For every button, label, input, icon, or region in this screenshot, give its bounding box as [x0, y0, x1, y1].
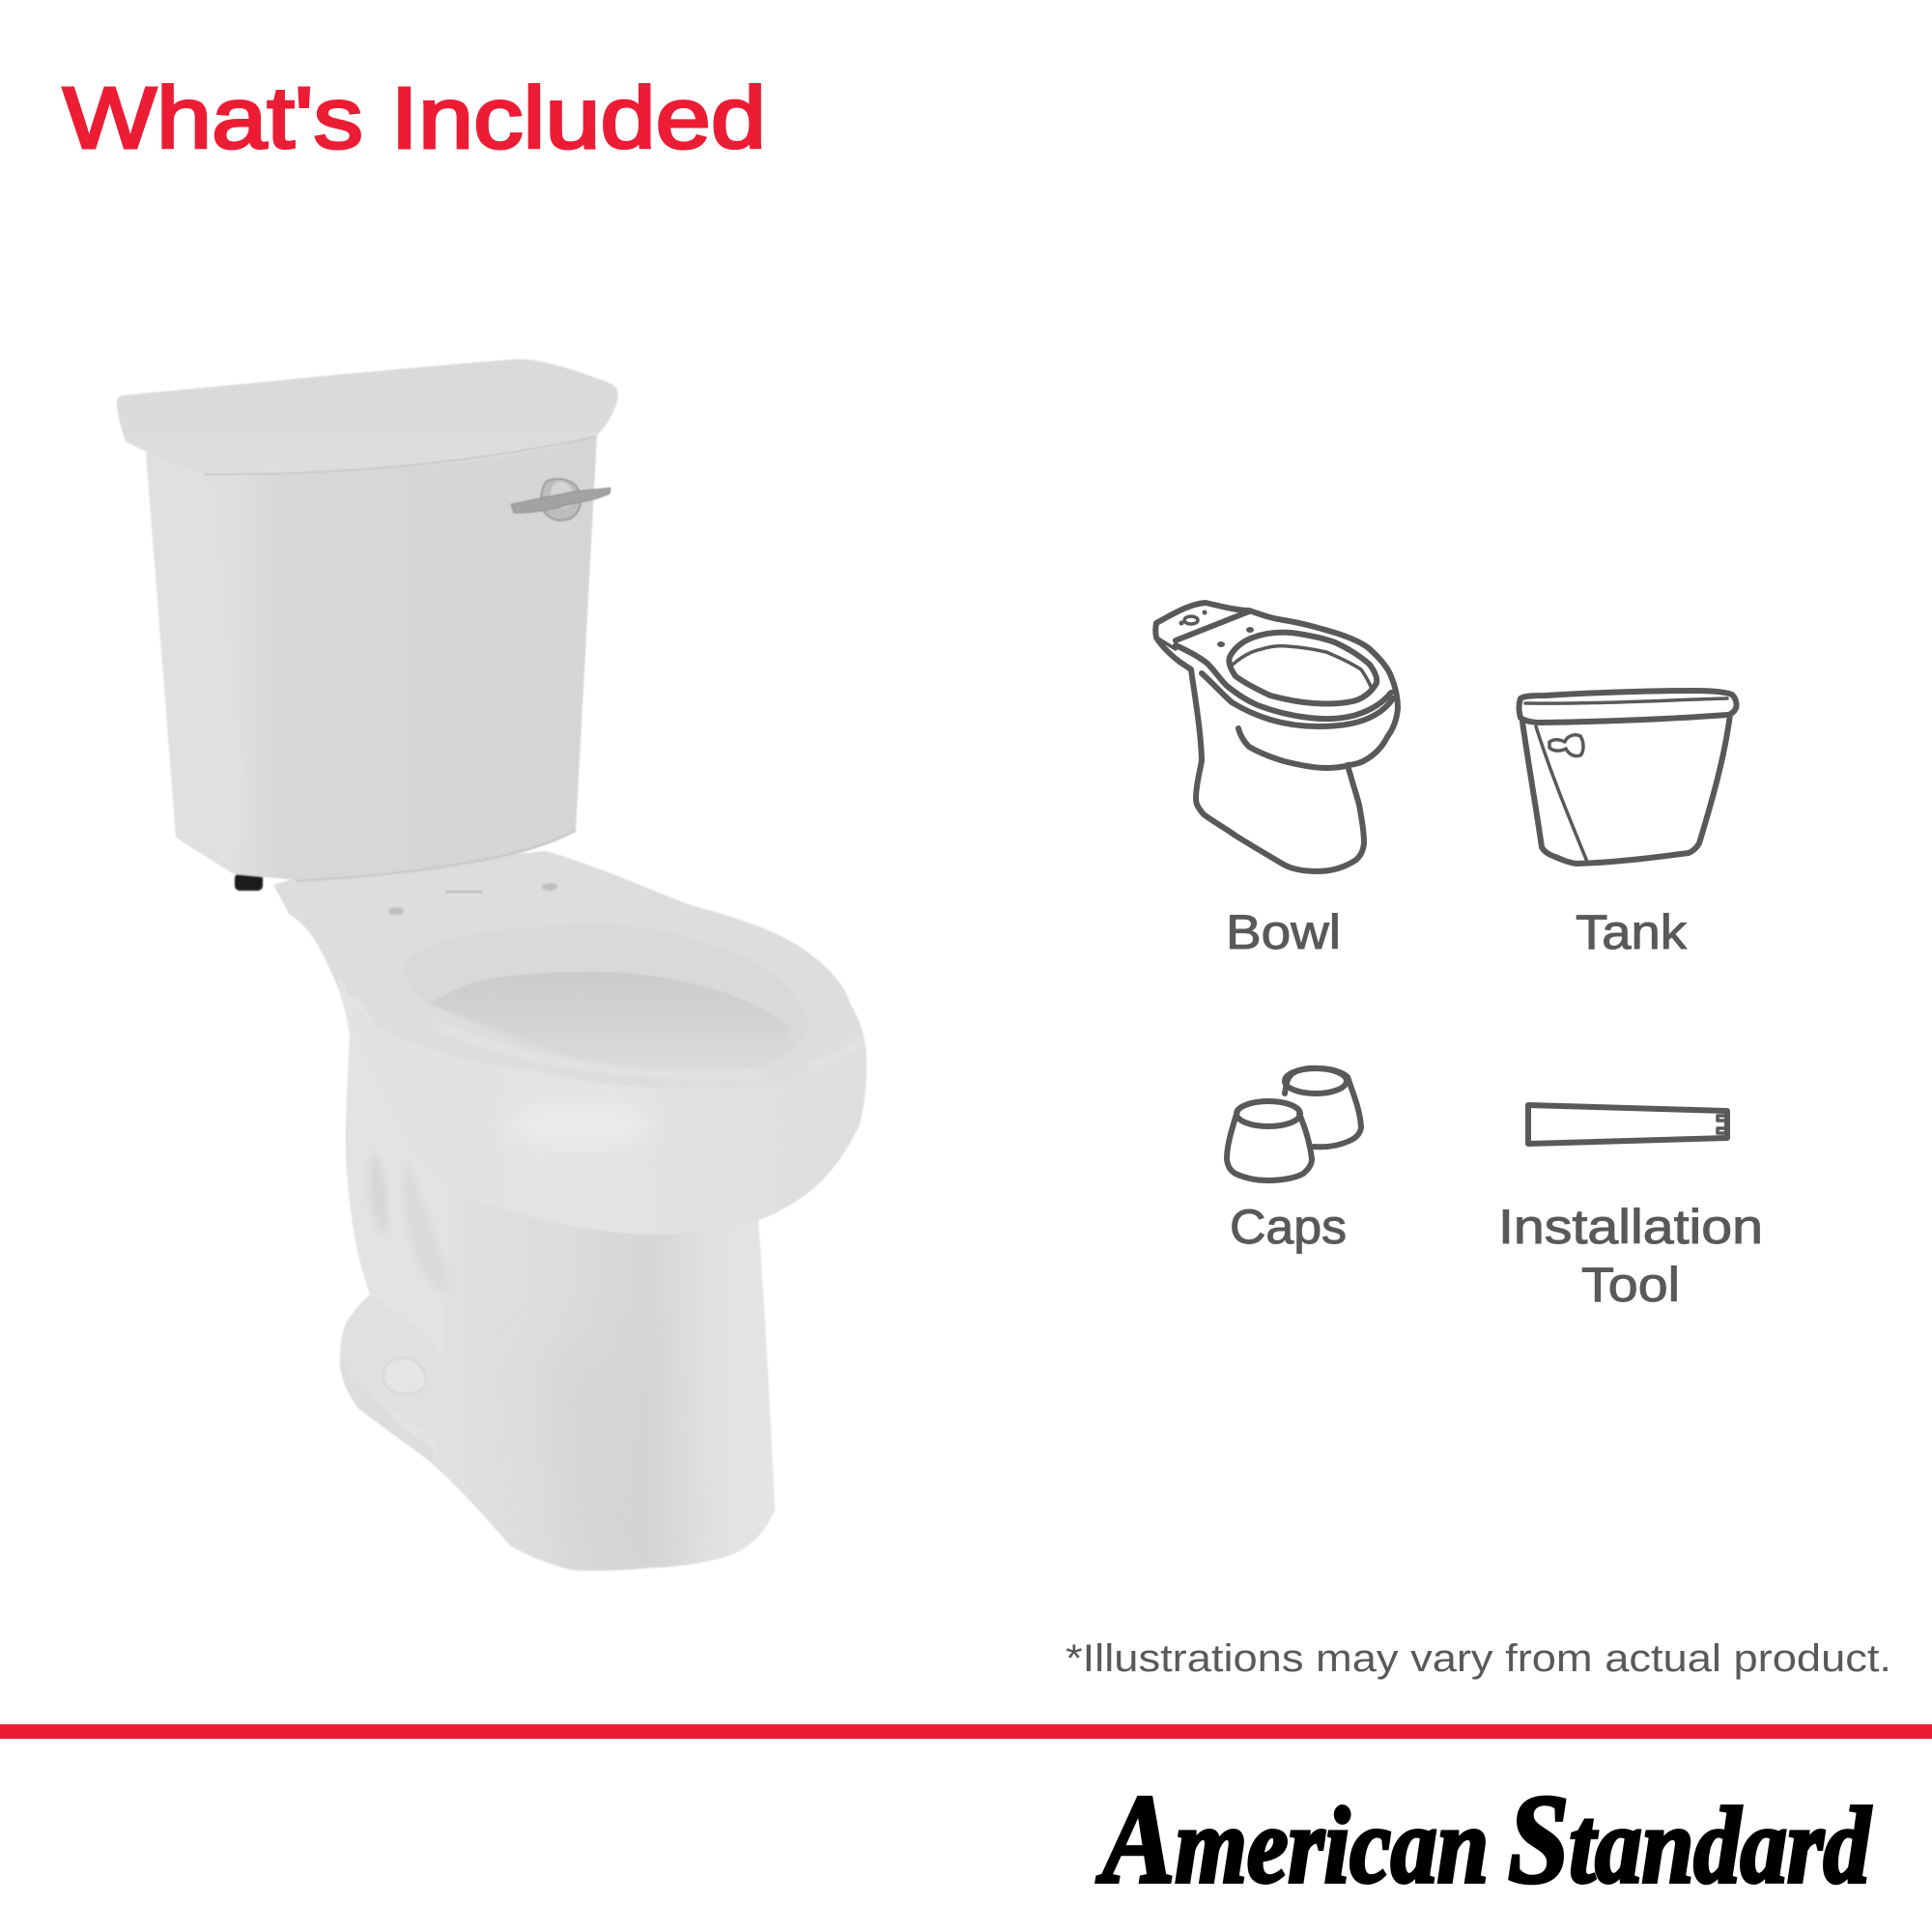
logo: American Standard [1096, 1768, 1872, 1910]
product photo: two-piece toilet [117, 359, 867, 1584]
flush handle [511, 479, 611, 521]
pedestal shade [541, 1352, 667, 1575]
rim highlight [807, 1039, 862, 1068]
hardware: bolt cap [384, 1358, 426, 1394]
disclaimer note: *Illustrations may vary from actual product. [1065, 1637, 1891, 1680]
logo: American Standard: American [1096, 1768, 1489, 1910]
logo: American Standard: Standard [1508, 1768, 1872, 1910]
left rear section [338, 966, 450, 1449]
icon: installation tool [1528, 1105, 1727, 1144]
black water inlet [235, 873, 263, 891]
pedestal [425, 1183, 782, 1584]
toilet bowl [273, 851, 867, 1584]
bowl interior [430, 972, 790, 1067]
tank lid [117, 359, 618, 474]
tank [117, 359, 618, 881]
label: installation tool: Installation [1498, 1200, 1763, 1254]
seat holes [388, 883, 557, 915]
icon: tank [1519, 691, 1737, 864]
foot [340, 1294, 440, 1437]
icon: caps [1227, 1068, 1361, 1180]
label: tank: Tank [1576, 905, 1688, 959]
title: What's Included [63, 71, 766, 167]
inner lip [404, 924, 807, 1073]
label: caps: Caps [1230, 1200, 1347, 1254]
label: installation tool [1498, 1200, 1763, 1312]
label: installation tool: Tool [1581, 1258, 1680, 1312]
label: bowl: Bowl [1226, 905, 1341, 959]
rim underside [585, 1197, 671, 1235]
red divider bar [0, 1724, 1932, 1739]
icon: bowl [1155, 603, 1398, 871]
rim top surface [273, 851, 860, 1088]
